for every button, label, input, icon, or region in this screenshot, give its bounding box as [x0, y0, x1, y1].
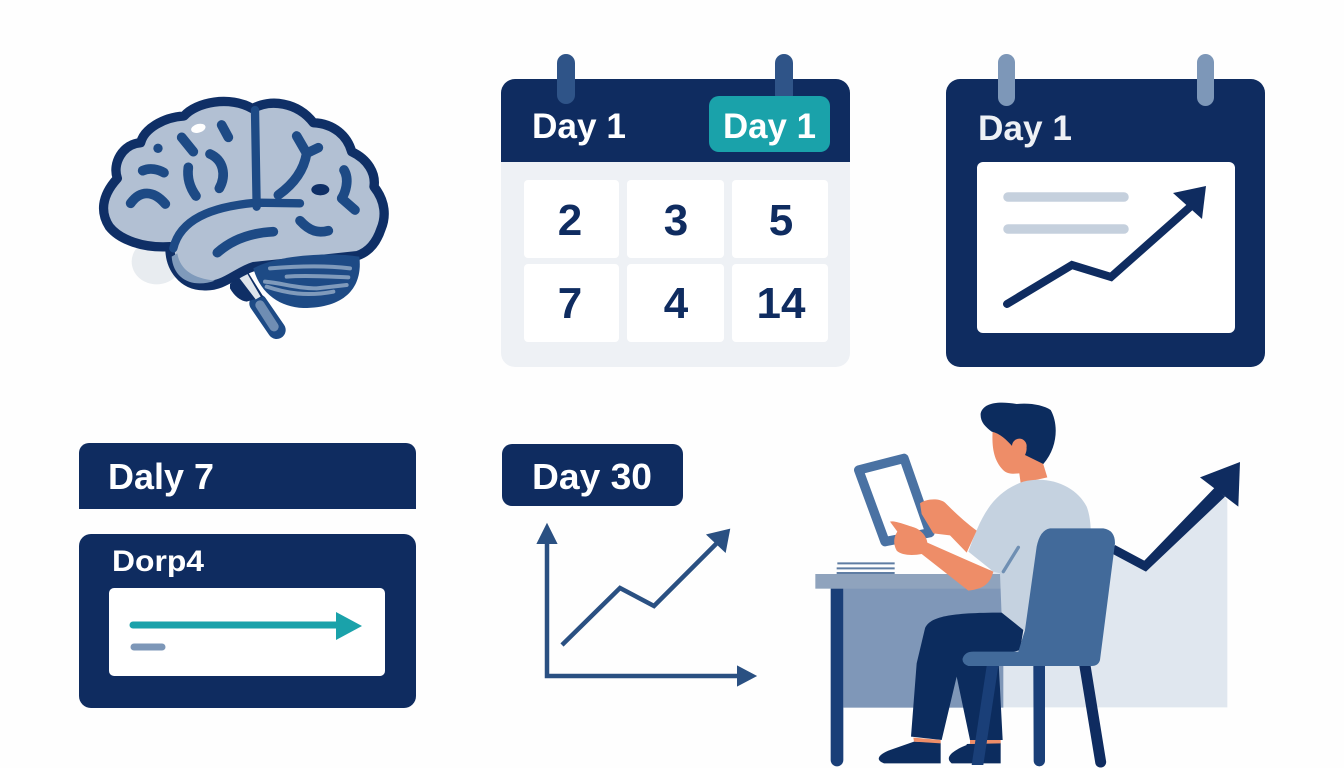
- badge: Day 30: Day 30: [532, 456, 652, 497]
- illustration: person at desk with tablet: [815, 403, 1240, 767]
- calendar numbers: 7: [558, 279, 582, 328]
- calendar numbers: 14: [757, 279, 806, 328]
- calendar numbers: 5: [769, 196, 793, 245]
- shirt: [968, 480, 1091, 630]
- line chart: [538, 525, 755, 685]
- arrow: growth: [1112, 462, 1240, 572]
- arms and hands: [890, 499, 993, 591]
- calendar numbers: [558, 196, 806, 328]
- panel: calendar with numbers: [501, 54, 850, 367]
- heading: Day 1: Day 1: [978, 109, 1072, 148]
- desk: [815, 563, 1003, 766]
- growth area: [843, 493, 1227, 707]
- badge: Day 1: [709, 96, 830, 152]
- legs and shoes: [879, 613, 1023, 763]
- chair: [963, 528, 1115, 767]
- badge: Day 30: [502, 444, 683, 506]
- calendar rings: [998, 54, 1214, 106]
- badge: Day 1: Day 1: [723, 107, 816, 146]
- calendar numbers: 4: [664, 279, 689, 328]
- label: Dorp4: [112, 545, 204, 578]
- calendar cells: [524, 180, 828, 342]
- icon: brain: [104, 101, 384, 330]
- heading: Day 1: Day 1: [532, 107, 626, 146]
- panel: progress arrow card: [79, 534, 416, 708]
- arrow: teal: [133, 612, 362, 640]
- arrow: rising trend: [1007, 186, 1206, 304]
- calendar numbers: 2: [558, 196, 582, 245]
- panel: calendar with progress chart: [946, 54, 1265, 367]
- inner card: [109, 588, 385, 676]
- tablet: [859, 458, 930, 542]
- calendar numbers: 3: [664, 196, 688, 245]
- chart card: [977, 162, 1235, 333]
- header bar: Day 7: Daly 7: [108, 456, 214, 497]
- neck and head: [992, 427, 1047, 483]
- calendar rings: [557, 54, 793, 104]
- header bar: Day 7: [79, 443, 416, 509]
